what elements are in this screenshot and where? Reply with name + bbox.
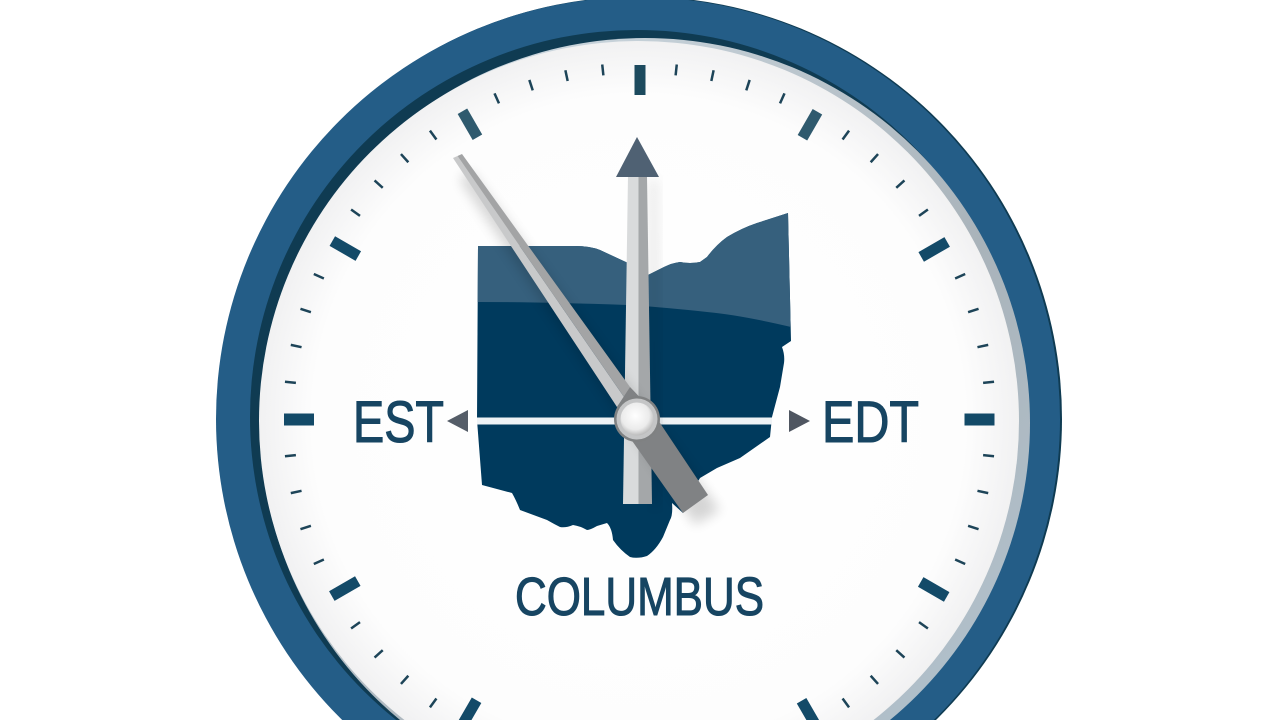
Ohio state silhouette bbox=[470, 205, 800, 565]
clock infographic bbox=[216, 0, 1062, 720]
clock face bbox=[250, 30, 1030, 720]
horizontal divider line bbox=[477, 418, 772, 424]
COLUMBUS label: COLUMBUS bbox=[515, 567, 764, 627]
EDT label: EDT bbox=[822, 390, 919, 455]
hour ticks bbox=[284, 65, 994, 720]
hour hand shadow bbox=[650, 180, 660, 505]
clock rim bbox=[216, 0, 1062, 720]
Ohio glass highlight bbox=[478, 213, 791, 327]
EST label: EST bbox=[353, 390, 444, 455]
EST arrow bbox=[447, 410, 468, 432]
centre hub bbox=[614, 396, 660, 442]
EDT arrow bbox=[789, 410, 810, 432]
minute hand bbox=[453, 154, 708, 513]
minute hand shadow bbox=[460, 170, 720, 525]
hour hand bbox=[616, 137, 659, 504]
minute ticks bbox=[285, 64, 994, 707]
